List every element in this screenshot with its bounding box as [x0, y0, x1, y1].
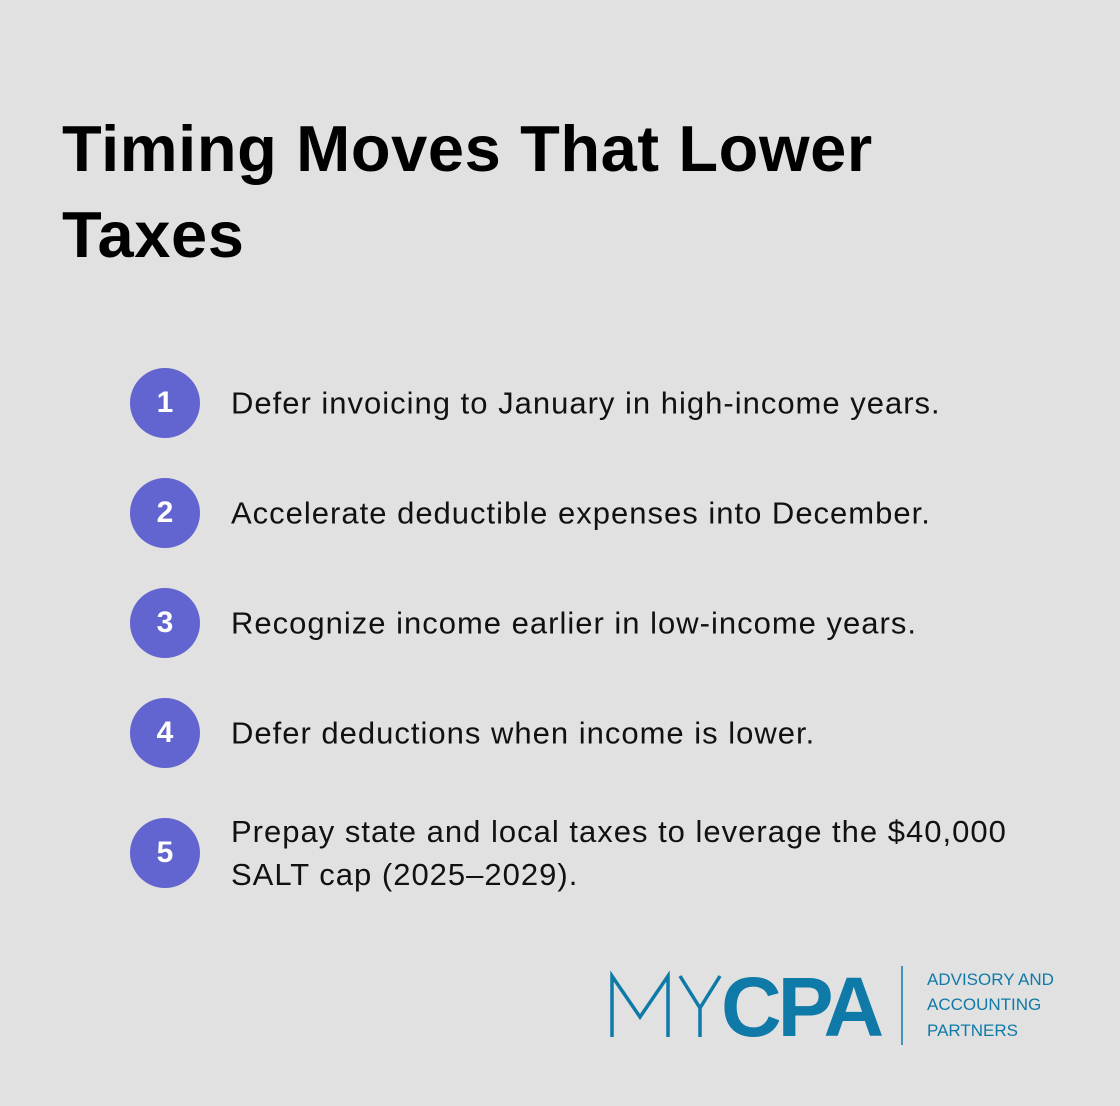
logo — [610, 960, 1054, 1050]
item 1 — [130, 368, 941, 438]
item 2: Accelerate deductible expenses into December. — [231, 496, 931, 530]
logo tagline: ADVISORY AND — [927, 970, 1054, 989]
item 3 — [130, 588, 917, 658]
title: Timing Moves That Lower — [62, 112, 873, 185]
item 4: 4 — [157, 716, 173, 749]
item 5: 5 — [157, 836, 173, 869]
item 1: Defer invoicing to January in high-income years. — [231, 386, 941, 420]
item 4 — [130, 698, 815, 768]
item 2: 2 — [157, 496, 173, 529]
item 4: Defer deductions when income is lower. — [231, 716, 815, 750]
title — [62, 112, 873, 271]
item 2 — [130, 478, 931, 548]
item 3: Recognize income earlier in low-income years. — [231, 606, 917, 640]
item 5: Prepay state and local taxes to leverage the $40,000 — [231, 814, 1007, 849]
item 5 — [130, 814, 1007, 892]
item 1: 1 — [157, 386, 173, 419]
logo tagline: PARTNERS — [927, 1021, 1018, 1040]
logo MY — [612, 976, 720, 1037]
item 5: SALT cap (2025–2029). — [231, 857, 578, 892]
logo tagline — [927, 970, 1054, 1040]
title: Taxes — [62, 198, 244, 271]
logo tagline: ACCOUNTING — [927, 995, 1041, 1014]
item 3: 3 — [157, 606, 173, 639]
